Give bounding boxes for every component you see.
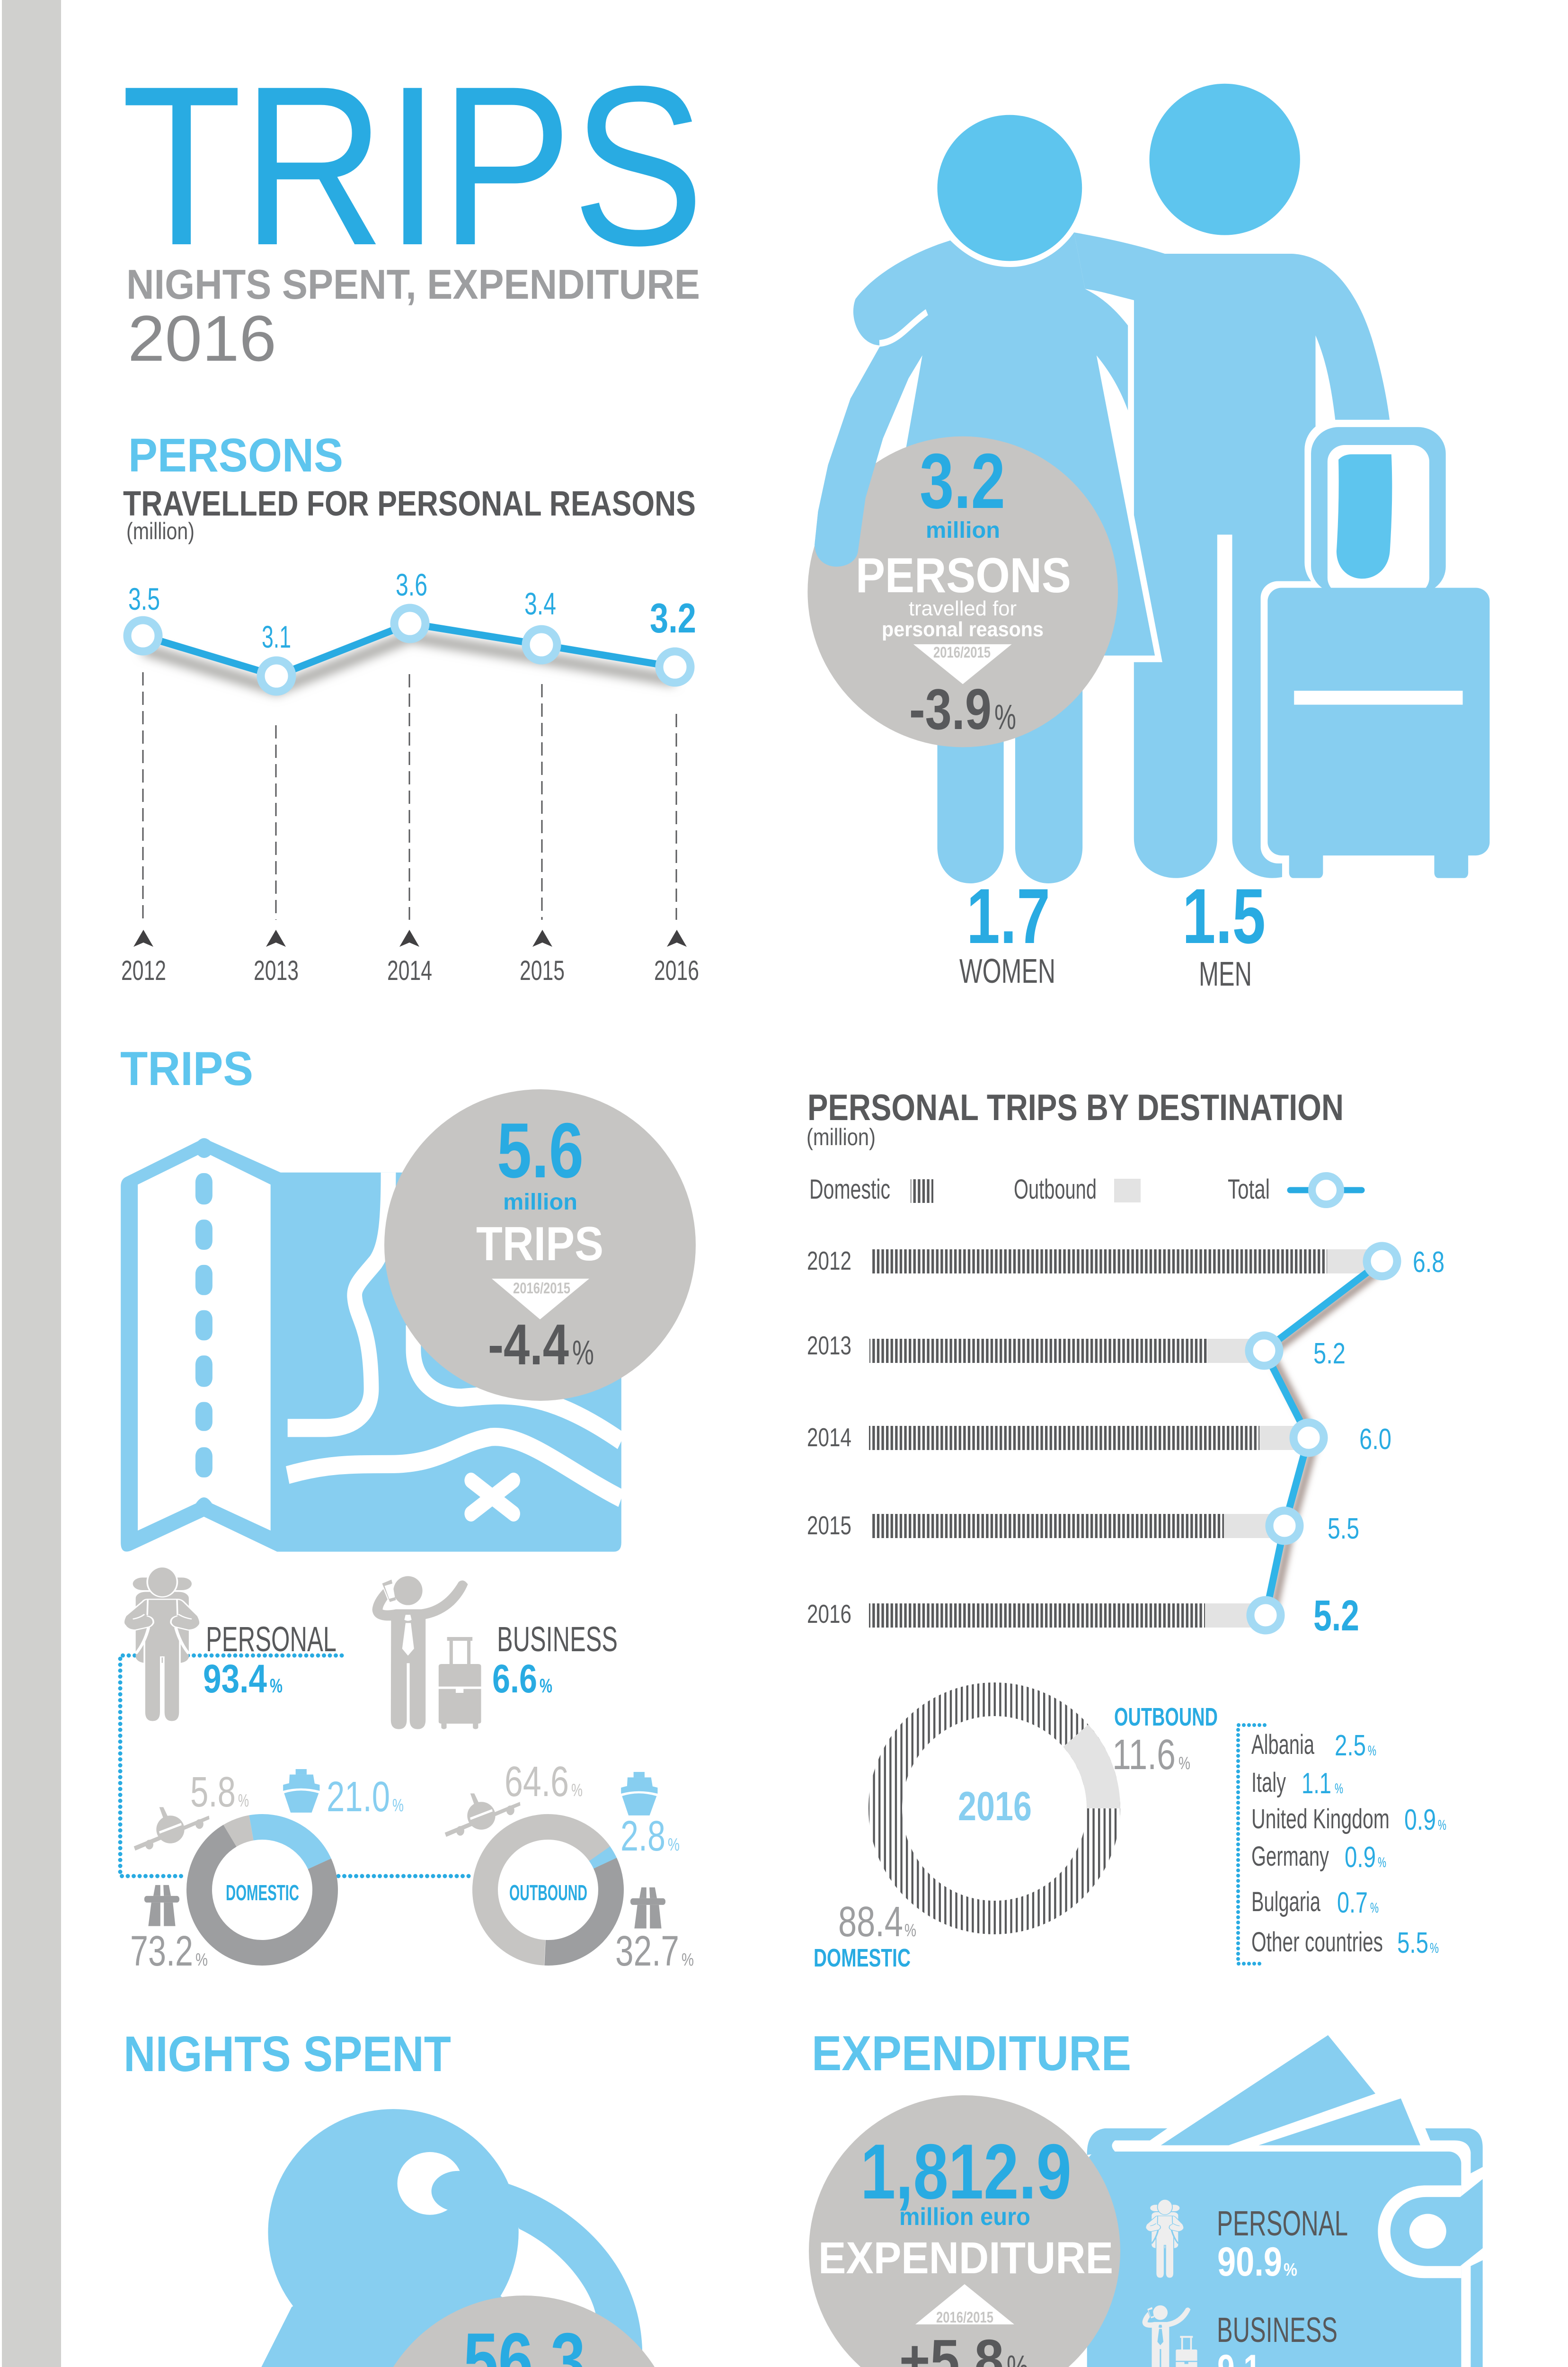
- trips bubble: TRIPS: [476, 1218, 603, 1271]
- suitcase: [1261, 420, 1495, 881]
- title: TRIPS: [121, 38, 704, 293]
- section heading: expenditure: EXPENDITURE: [812, 2026, 1131, 2081]
- outbound destinations list: Germany: [1251, 1841, 1329, 1872]
- dotted connector lines: [120, 1655, 472, 1876]
- transport icons and shares: 5.8: [190, 1769, 236, 1816]
- persons bubble text: million: [926, 518, 1000, 543]
- women value: 1.7: [966, 872, 1050, 960]
- bubble arrow: [913, 644, 1012, 684]
- icon: ship domestic: [283, 1769, 319, 1813]
- bar chart: trips by destination: 6.0: [1359, 1423, 1391, 1456]
- section heading: nights spent: NIGHTS SPENT: [124, 2026, 451, 2082]
- trips bubble: %: [572, 1334, 594, 1372]
- business share: %: [540, 1674, 552, 1697]
- business share: 6.6: [492, 1656, 537, 1701]
- line chart: persons by year: 2013: [254, 955, 299, 986]
- unit label: (million): [806, 1124, 876, 1150]
- women value: WOMEN: [959, 952, 1055, 990]
- transport icons and shares: 64.6: [505, 1758, 569, 1806]
- icon: businessman: [372, 1576, 481, 1729]
- persons bubble text: PERSONS: [856, 548, 1071, 603]
- woman body: [815, 232, 1155, 656]
- transport icons and shares: 32.7: [615, 1928, 679, 1975]
- wallet: business share: [1217, 2310, 1338, 2367]
- transport icons and shares: %: [392, 1796, 404, 1815]
- section heading: trips: TRIPS: [120, 1042, 253, 1095]
- persons bubble text: %: [994, 697, 1016, 737]
- outbound destinations list: 5.5: [1397, 1927, 1428, 1959]
- icon: road domestic: [144, 1885, 179, 1926]
- bar chart: trips by destination: 2014: [807, 1423, 851, 1452]
- persons bubble text: 2016/2015: [933, 644, 991, 661]
- outbound share label: 11.6: [1112, 1731, 1176, 1779]
- outbound destinations list: %: [1335, 1781, 1343, 1797]
- personal share: 93.4: [203, 1656, 267, 1701]
- personal share: %: [270, 1674, 283, 1697]
- bar chart: trips by destination: [807, 1246, 1444, 1640]
- legend: [809, 1174, 1362, 1205]
- trips bubble: million: [503, 1190, 577, 1215]
- illustration: couple with suitcase: [807, 84, 1495, 883]
- icon: backpacker: [124, 1567, 200, 1722]
- bar chart: trips by destination: 2015: [807, 1511, 851, 1540]
- section heading: persons: PERSONS: [128, 429, 343, 482]
- trips bubble: 5.6: [497, 1107, 584, 1194]
- outbound destinations list: [1238, 1725, 1446, 1964]
- transport icons and shares: %: [238, 1791, 249, 1811]
- bar chart: trips by destination: 2016: [807, 1599, 851, 1628]
- chart heading: travelled for personal reasons: TRAVELLED FOR PERSONAL REASONS: [123, 484, 696, 523]
- line chart: persons by year: 2012: [121, 955, 166, 986]
- transport icons and shares: 73.2: [130, 1928, 193, 1975]
- outbound destinations list: %: [1368, 1743, 1376, 1759]
- persons bubble text: 3.2: [920, 437, 1005, 525]
- transport icons and shares: %: [571, 1780, 583, 1800]
- bar chart: trips by destination: 2012: [807, 1246, 851, 1275]
- trips bubble: -4.4: [488, 1312, 569, 1377]
- year: 2016: [128, 303, 276, 375]
- line chart: persons by year: 3.1: [262, 619, 291, 654]
- outbound destinations list: 2.5: [1335, 1729, 1366, 1762]
- persons bubble text: personal reasons: [882, 618, 1044, 641]
- expenditure bubble: 1,812.9: [860, 2128, 1072, 2215]
- wallet: backpacker icon: [1146, 2199, 1184, 2278]
- unit label: (million): [126, 518, 195, 544]
- bar chart: trips by destination: 5.5: [1328, 1513, 1359, 1545]
- outbound share label: OUTBOUND: [1114, 1703, 1218, 1731]
- icon: wallet: [1087, 2035, 1483, 2367]
- persons bubble text: -3.9: [909, 677, 992, 741]
- line chart: persons by year: 2016: [654, 955, 699, 986]
- personal share: [203, 1620, 337, 1701]
- domestic share label: 88.4: [838, 1898, 903, 1946]
- left sidebar: [2, 0, 61, 2367]
- icon: road outbound: [630, 1887, 665, 1929]
- nights spent bubble: [369, 2296, 679, 2367]
- trips bubble: 2016/2015: [513, 1280, 570, 1297]
- wallet: business share: BUSINESS: [1217, 2310, 1338, 2349]
- personal share: PERSONAL: [206, 1620, 337, 1659]
- woman legs: [937, 664, 1082, 883]
- line chart: persons by year: 3.5: [128, 581, 160, 616]
- wallet: personal share: PERSONAL: [1217, 2204, 1348, 2243]
- expenditure bubble: million euro: [899, 2203, 1030, 2231]
- heads: [937, 115, 1082, 261]
- legend: Outbound: [1014, 1174, 1097, 1205]
- man body: [1074, 232, 1390, 878]
- persons bubble text: travelled for: [909, 597, 1017, 620]
- legend: Total: [1228, 1174, 1270, 1205]
- line chart: persons by year: 2014: [387, 955, 432, 986]
- donut: outbound: [461, 1802, 636, 1977]
- transport icons and shares: [130, 1758, 694, 1975]
- line chart: persons by year: 3.4: [524, 586, 556, 621]
- men value: [1182, 872, 1266, 993]
- outbound destinations list: 1.1: [1302, 1767, 1331, 1800]
- subtitle: NIGHTS SPENT, EXPENDITURE: [126, 261, 700, 308]
- outbound destinations list: United Kingdom: [1251, 1804, 1390, 1834]
- outbound share label: %: [1178, 1753, 1190, 1773]
- men value: 1.5: [1182, 872, 1266, 960]
- icon: ship outbound: [621, 1772, 657, 1815]
- outbound destinations list: Bulgaria: [1251, 1886, 1321, 1917]
- outbound destinations list: %: [1378, 1855, 1386, 1870]
- wallet: businessman icon: [1143, 2305, 1197, 2367]
- line chart: persons by year: 3.6: [396, 567, 427, 602]
- icon: plane outbound: [445, 1793, 521, 1837]
- chart heading: personal trips by destination: PERSONAL TRIPS BY DESTINATION: [807, 1086, 1344, 1128]
- business share: [492, 1620, 618, 1701]
- persons bubble text: [856, 437, 1071, 741]
- women value: [959, 872, 1055, 990]
- expenditure bubble: EXPENDITURE: [818, 2233, 1113, 2283]
- outbound destinations list: Albania: [1251, 1729, 1315, 1760]
- outbound destinations list: 0.9: [1345, 1841, 1376, 1874]
- expenditure bubble: 2016/2015: [936, 2309, 993, 2326]
- outbound destinations list: %: [1438, 1817, 1446, 1833]
- donut: outbound: OUTBOUND: [509, 1880, 587, 1905]
- bar chart: trips by destination: 5.2: [1313, 1592, 1359, 1640]
- woman arm over bubble: [815, 336, 908, 567]
- icon: key: [129, 2109, 642, 2367]
- transport icons and shares: 2.8: [620, 1813, 665, 1860]
- wallet: personal share: 90.9: [1217, 2239, 1282, 2285]
- domestic share label: DOMESTIC: [814, 1944, 911, 1972]
- outbound share label: [1112, 1703, 1218, 1779]
- donut: domestic: [176, 1804, 348, 1976]
- line chart: persons by year: 3.2: [650, 595, 696, 641]
- outbound destinations list: Italy: [1251, 1767, 1286, 1798]
- trips bubble: [384, 1089, 696, 1401]
- line chart: persons by year: [121, 567, 699, 986]
- donut: domestic: DOMESTIC: [226, 1880, 299, 1905]
- icon: plane domestic: [134, 1807, 210, 1851]
- line chart: persons by year: 2015: [520, 955, 565, 986]
- outbound destinations list: %: [1370, 1900, 1379, 1916]
- transport icons and shares: %: [195, 1950, 208, 1970]
- transport icons and shares: 21.0: [327, 1773, 390, 1821]
- domestic share label: %: [904, 1921, 916, 1940]
- wallet: personal share: [1217, 2204, 1348, 2285]
- outbound destinations list: 0.7: [1337, 1886, 1368, 1919]
- bar chart: trips by destination: 6.8: [1413, 1246, 1444, 1279]
- business share: BUSINESS: [497, 1620, 618, 1659]
- transport icons and shares: %: [682, 1950, 694, 1970]
- expenditure bubble: [809, 2095, 1120, 2367]
- outbound destinations list: %: [1430, 1940, 1439, 1956]
- domestic share label: [814, 1898, 916, 1972]
- outbound destinations list: Other countries: [1251, 1927, 1383, 1958]
- wallet: personal share: %: [1284, 2260, 1297, 2280]
- men value: MEN: [1199, 955, 1252, 993]
- transport icons and shares: %: [668, 1835, 680, 1855]
- hatched donut 2016: 2016: [958, 1784, 1032, 1829]
- legend: Domestic: [809, 1174, 890, 1205]
- bar chart: trips by destination: 2013: [807, 1331, 851, 1360]
- hatched donut 2016: [841, 1655, 1148, 1962]
- bar chart: trips by destination: 5.2: [1313, 1337, 1346, 1370]
- persons bubble: [807, 436, 1118, 747]
- icon: folded map: [121, 1138, 621, 1552]
- outbound destinations list: 0.9: [1404, 1804, 1436, 1836]
